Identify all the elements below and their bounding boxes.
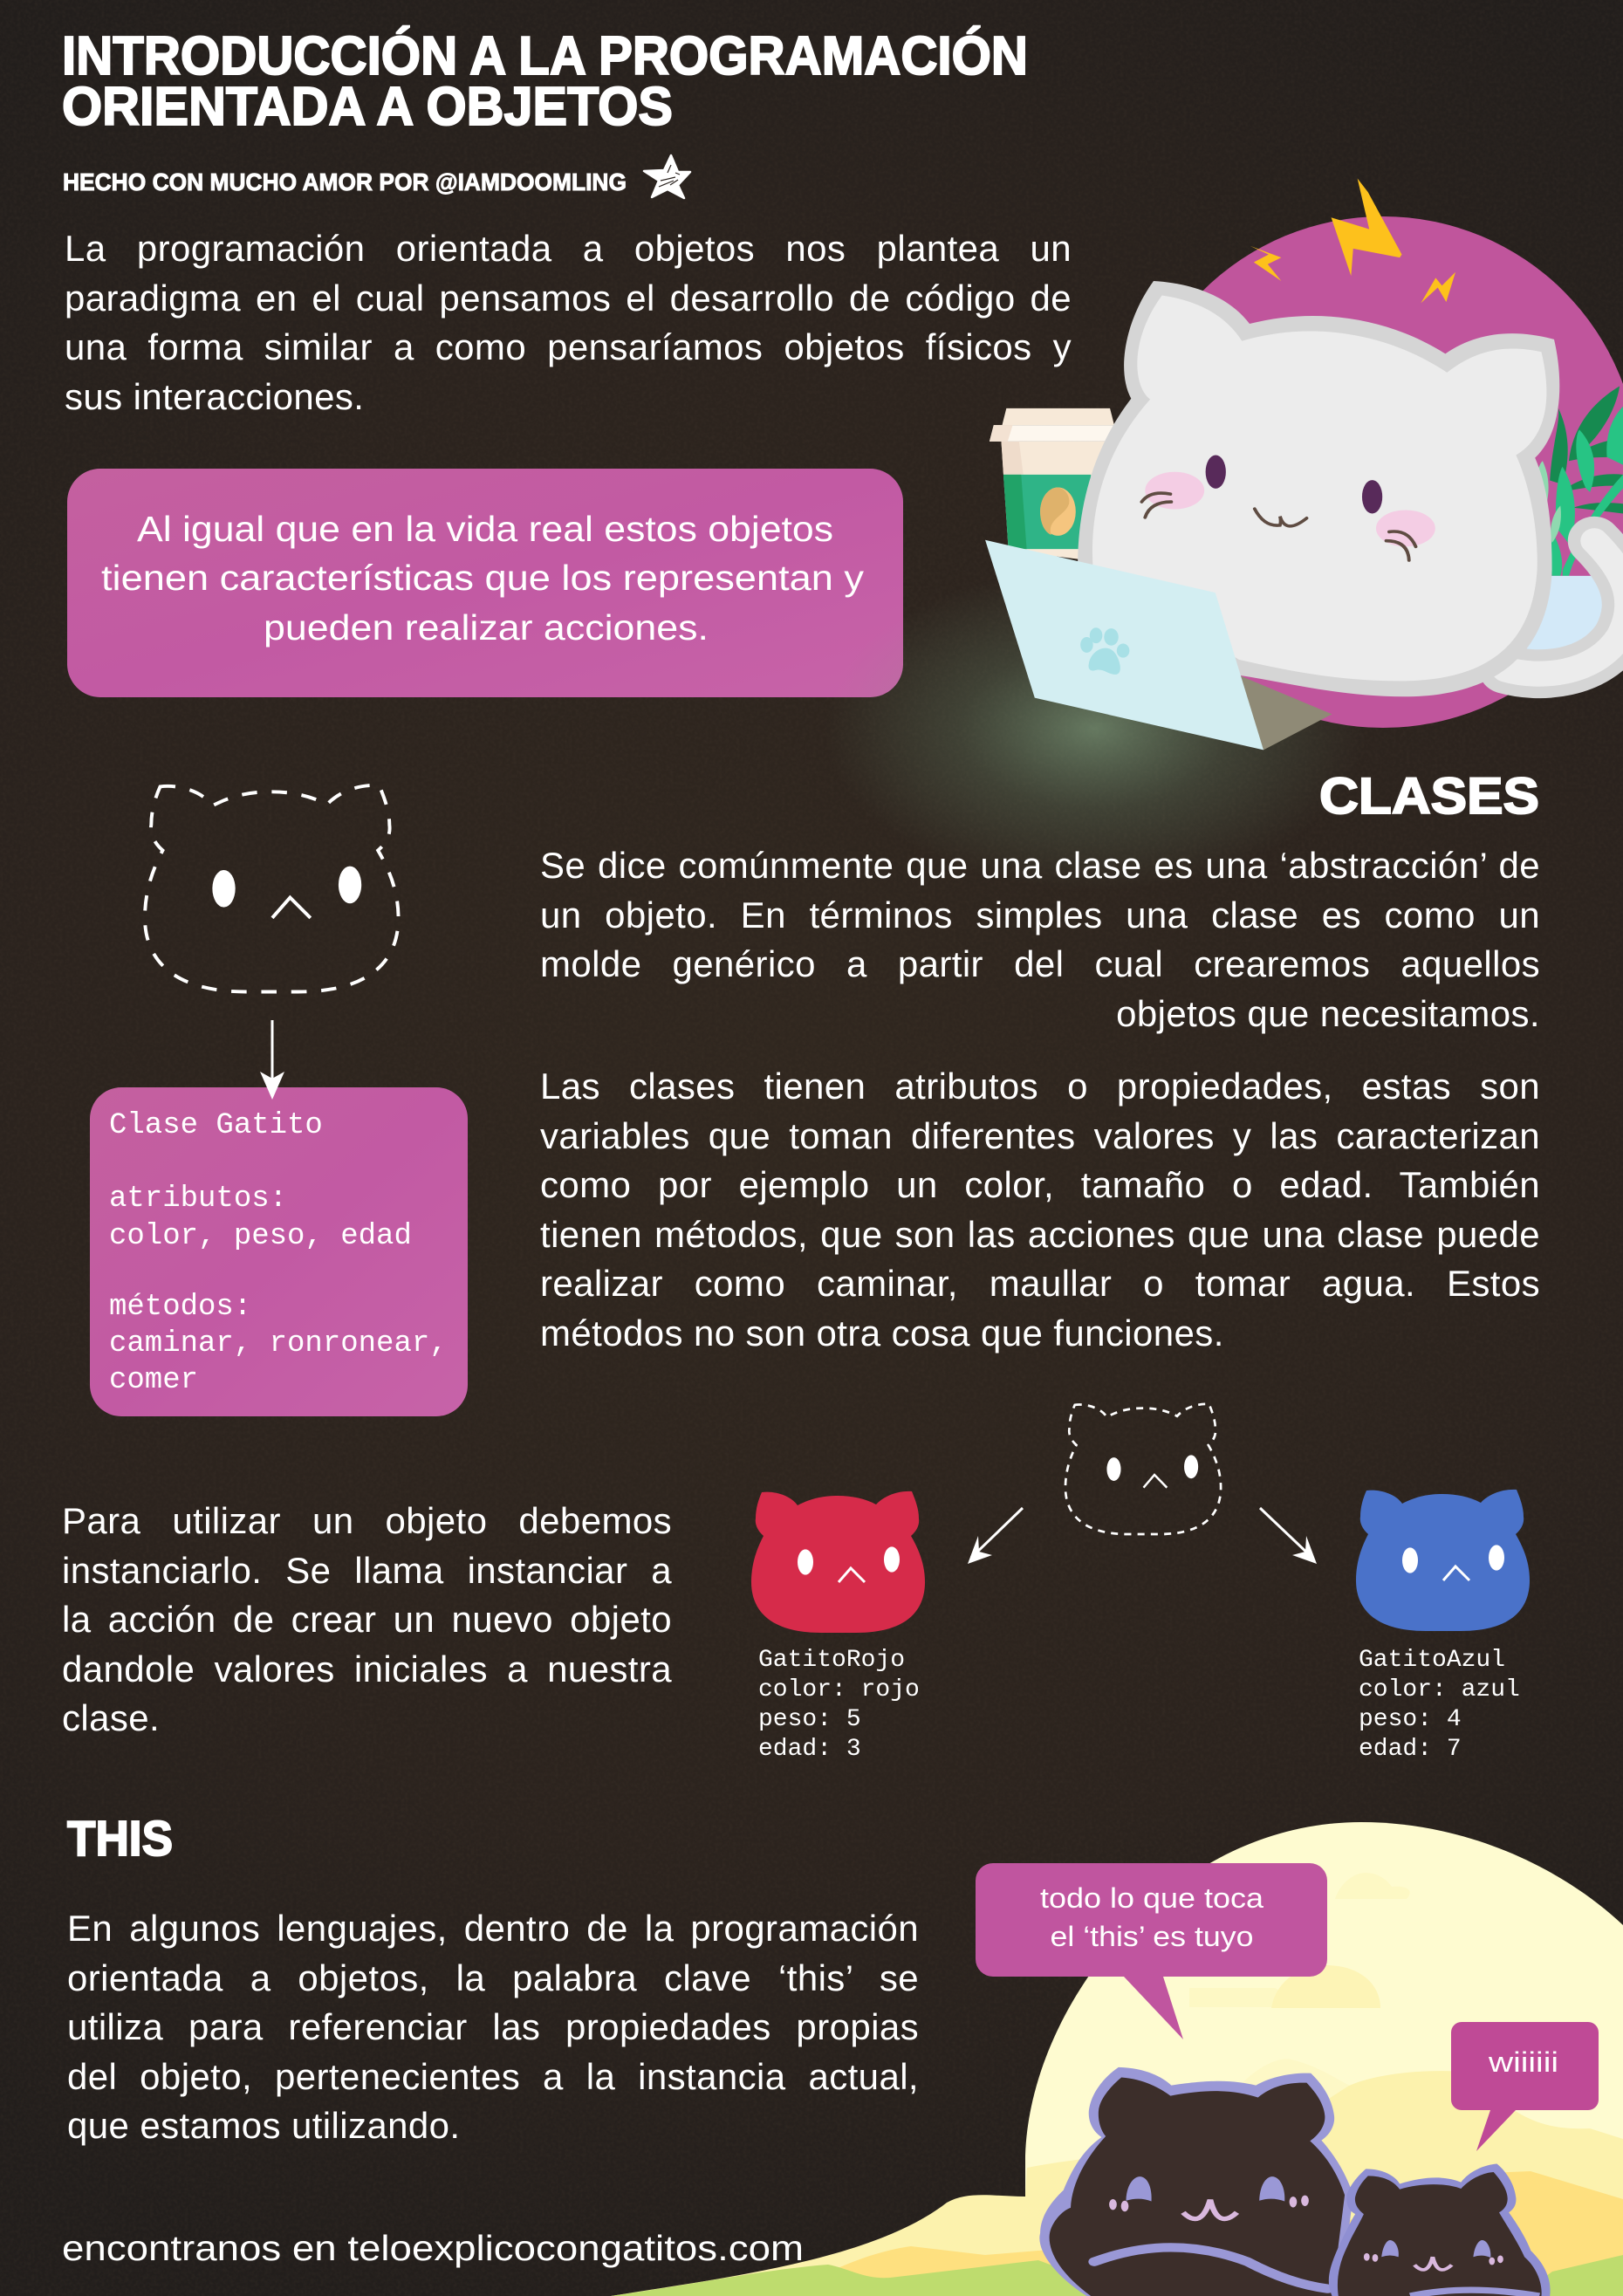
- text block: atributos y métodos: como por ejemplo un color, tamaño o edad. También: [540, 1164, 1540, 1205]
- label: gatito rojo: edad: 3: [758, 1736, 861, 1763]
- panel: clase gatito: comer: [109, 1364, 198, 1397]
- big cat tail: [1094, 2247, 1328, 2289]
- label: gatito azul: peso: 4: [1359, 1706, 1462, 1733]
- icon: lightning bolts: [1250, 179, 1455, 303]
- title: [62, 26, 1028, 137]
- text block: intro: sus interacciones.: [65, 375, 364, 417]
- plant pot: [1526, 576, 1607, 658]
- heading: clases: CLASES: [1319, 768, 1539, 825]
- cat whiskers and mouth: [1141, 493, 1416, 560]
- label: gatito rojo: peso: 5: [758, 1706, 861, 1733]
- callout: pink box: tienen características que los representan y: [101, 558, 865, 598]
- heading: this: THIS: [67, 1811, 173, 1867]
- text block: instanciar: Para utilizar un objeto debemos: [62, 1500, 672, 1541]
- icon: dashed cat class: [145, 785, 399, 992]
- arrow: class to box: [260, 1020, 284, 1100]
- panel: clase gatito: métodos:: [109, 1291, 251, 1324]
- callout: pink box: Al igual que en la vida real estos objetos: [137, 509, 833, 549]
- text block: intro: paradigma en el cual pensamos el desarrollo de código de: [65, 278, 1072, 318]
- text block: intro: La programación orientada a objetos nos plantea un: [65, 228, 1072, 269]
- title: ORIENTADA A OBJETOS: [62, 77, 673, 137]
- label: gatito rojo: GatitoRojo: [758, 1647, 905, 1674]
- text block: this: [67, 1908, 919, 2146]
- panel: clase gatito: color, peso, edad: [109, 1220, 412, 1253]
- speech bubble: wiiiiii: [1451, 2022, 1599, 2151]
- cat body outline: [1078, 281, 1559, 696]
- coffee cup: [990, 408, 1114, 562]
- panel: clase gatito: Clase Gatito: [109, 1109, 323, 1142]
- text block: atributos y métodos: Las clases tienen atributos o propiedades, estas son: [540, 1066, 1540, 1107]
- illustration: white cat with laptop: [985, 179, 1623, 750]
- text block: clases definition: Se dice comúnmente que una clase es una ‘abstracción’ de: [540, 845, 1540, 886]
- text block: this: utiliza para referenciar las propiedades propias: [67, 2006, 919, 2047]
- laptop screen: [985, 540, 1263, 750]
- arrow: to blue cat: [1260, 1508, 1317, 1564]
- speech bubble: wiiiiii: wiiiiii: [1488, 2046, 1558, 2078]
- big cat face: [1126, 2176, 1284, 2202]
- label: gatito azul: edad: 7: [1359, 1736, 1462, 1763]
- icon: blue cat: [1356, 1490, 1530, 1631]
- label: gatito rojo: color: rojo: [758, 1676, 920, 1703]
- text block: atributos y métodos: variables que toman diferentes valores y las caracterizan: [540, 1115, 1540, 1155]
- text block: atributos y métodos: tienen métodos, que son las acciones que una clase puede: [540, 1213, 1540, 1255]
- laptop screen glow: [825, 567, 1366, 890]
- text block: atributos y métodos: [540, 1066, 1540, 1353]
- text block: instanciar: [62, 1500, 672, 1738]
- icon: scribbled star: [644, 155, 690, 198]
- label: gatito azul: GatitoAzul: [1359, 1647, 1505, 1674]
- icon: paw: [1080, 627, 1129, 675]
- speech bubble: todo lo que toca: [976, 1863, 1327, 2039]
- illustration: moon and hills: [611, 1822, 1623, 2296]
- speech bubble: todo lo que toca: el ‘this’ es tuyo: [1051, 1921, 1253, 1952]
- laptop base: [1239, 675, 1332, 750]
- plant: [1536, 386, 1623, 576]
- icon: small dashed cat: [1065, 1404, 1221, 1534]
- text block: atributos y métodos: realizar como caminar, maullar o tomar agua. Estos: [540, 1263, 1540, 1304]
- text block: clases definition: un objeto. En términos simples una clase es como un: [540, 894, 1540, 936]
- callout: pink box: [67, 469, 903, 697]
- text block: this: orientada a objetos, la palabra clave ‘this’ se: [67, 1957, 919, 1998]
- title: INTRODUCCIÓN A LA PROGRAMACIÓN: [62, 26, 1028, 86]
- text block: clases definition: molde genérico a partir del cual crearemos aquellos: [540, 943, 1540, 984]
- text block: intro: una forma similar a como pensaríamos objetos físicos y: [65, 326, 1072, 367]
- text block: instanciar: la acción de crear un nuevo objeto: [62, 1599, 672, 1640]
- arrow: to red cat: [968, 1508, 1023, 1564]
- icon: red cat: [751, 1491, 925, 1633]
- label: gatito rojo: [758, 1647, 920, 1763]
- cat body: [1092, 295, 1546, 681]
- panel: clase gatito: [90, 1087, 468, 1416]
- text block: intro: [65, 228, 1072, 417]
- text block: instanciar: clase.: [62, 1697, 160, 1738]
- text block: this: En algunos lenguajes, dentro de la programación: [67, 1908, 919, 1949]
- cat tail: [1505, 541, 1623, 674]
- cat eyes: [1206, 455, 1226, 489]
- small cat: [1329, 2164, 1551, 2296]
- illustration: black cats: [1039, 2067, 1551, 2296]
- text block: instanciar: dandole valores iniciales a nuestra: [62, 1648, 672, 1689]
- text block: instanciar: instanciarlo. Se llama instanciar a: [62, 1550, 672, 1590]
- pink circle behind cat: [1127, 216, 1623, 728]
- text block: clases definition: [540, 845, 1540, 1033]
- speech bubble: todo lo que toca: todo lo que toca: [1040, 1882, 1263, 1914]
- panel: clase gatito: caminar, ronronear,: [109, 1327, 448, 1360]
- small cat face: [1381, 2240, 1490, 2258]
- footer text: encontranos en teloexplicocongatitos.com: [62, 2228, 804, 2268]
- cat blush: [1145, 472, 1204, 510]
- text block: atributos y métodos: métodos no son otra cosa que funciones.: [540, 1312, 1224, 1353]
- text block: clases definition: objetos que necesitamos.: [1116, 993, 1540, 1033]
- subtitle: HECHO CON MUCHO AMOR POR @IAMDOOMLING: [63, 168, 627, 195]
- label: gatito azul: [1359, 1647, 1520, 1763]
- text block: this: del objeto, pertenecientes a la instancia actual,: [67, 2056, 919, 2096]
- panel: clase gatito: atributos:: [109, 1182, 287, 1216]
- label: gatito azul: color: azul: [1359, 1676, 1520, 1703]
- big cat: [1039, 2067, 1353, 2296]
- callout: pink box: pueden realizar acciones.: [264, 607, 709, 648]
- text block: this: que estamos utilizando.: [67, 2105, 460, 2146]
